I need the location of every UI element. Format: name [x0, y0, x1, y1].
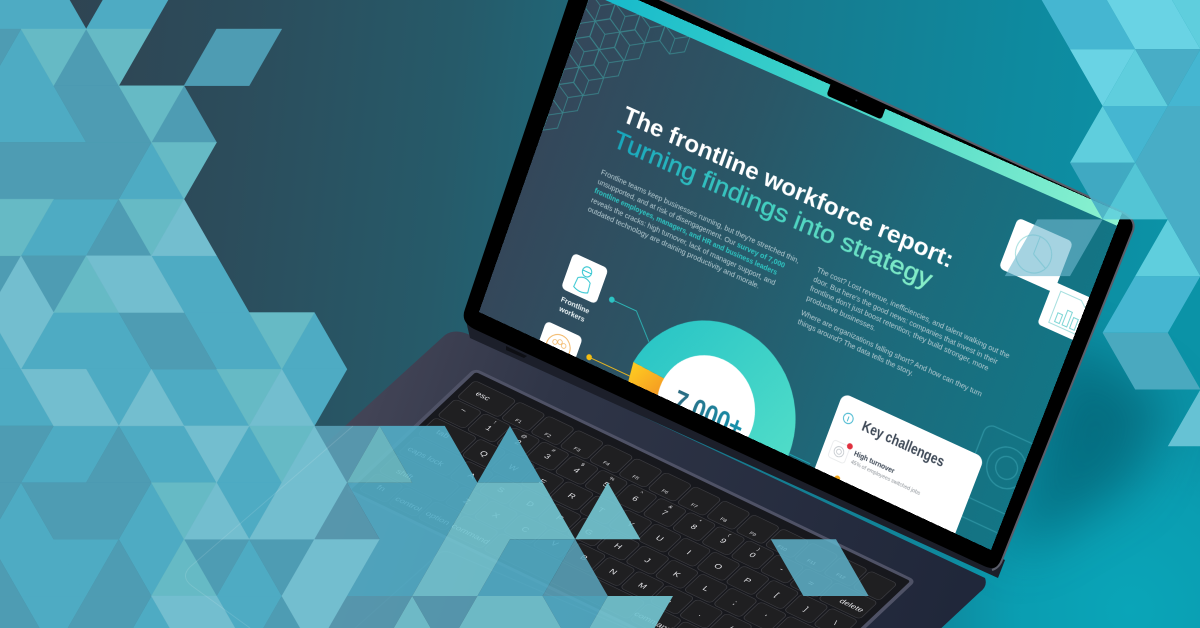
translucent triangles over lid corner: [1070, 163, 1135, 219]
key labels: shift: [394, 467, 416, 481]
right paragraph: things around? The data tells the story.: [793, 317, 904, 374]
key labels: option: [423, 509, 453, 527]
laptop lid bezel: [464, 0, 1134, 568]
key labels: [: [773, 591, 782, 599]
key labels: \: [831, 619, 841, 627]
item icon: high turnover: [828, 440, 850, 464]
key labels: O: [712, 562, 725, 571]
key labels: A: [466, 471, 478, 480]
donut value: 7,000+: [675, 386, 750, 447]
key labels: T: [595, 506, 607, 514]
key labels: control: [393, 495, 424, 513]
key labels: 4: [571, 466, 583, 475]
donut segment: yellow: [626, 362, 665, 397]
muted blue triangles: [1135, 49, 1200, 276]
pale cyan triangles: [1070, 0, 1200, 106]
key labels: G: [583, 527, 595, 537]
key labels: @: [519, 434, 528, 440]
key labels: !: [492, 421, 497, 425]
laptop screen: report page: [479, 0, 1122, 550]
key labels: F6: [660, 489, 670, 495]
key labels: tab: [434, 428, 452, 440]
bright blue triangles: [1037, 0, 1200, 333]
key labels: #: [550, 448, 557, 454]
info icon: [842, 412, 855, 425]
lower right glow: [900, 400, 1200, 628]
card: bar chart icon: [1037, 281, 1110, 349]
intro paragraph: Frontline teams keep businesses running, but they're stretched thin,: [604, 170, 795, 264]
card: pie chart icon: [999, 218, 1073, 293]
key labels: B: [578, 553, 590, 562]
translucent aqua over lid corner: [1103, 163, 1168, 219]
key labels: P: [742, 576, 754, 585]
label: frontline workers: workers: [565, 308, 593, 328]
laptop deck: [182, 332, 986, 628]
hexagon cube pattern: [531, 0, 693, 174]
laptop shadow: [1010, 340, 1165, 560]
key labels: R: [566, 491, 578, 500]
key labels: F1: [513, 418, 523, 425]
intro paragraph: reveals the cracks: high turnover, lack of manager support, and: [595, 198, 773, 286]
key labels: -: [777, 565, 787, 573]
right paragraph: door. But here's the good news: companies that invest in their: [807, 274, 981, 360]
right paragraph: Where are organizations falling short? And how can they turn: [796, 308, 967, 392]
translucent dark blue over keyboard: [314, 426, 608, 628]
key labels: F3: [572, 446, 582, 453]
key labels: I: [685, 549, 694, 556]
key labels: 1: [483, 424, 495, 432]
bottom right triangle: [1168, 390, 1200, 446]
right paragraph: The cost? Lost revenue, inefficiencies, and talent walking out the: [810, 265, 991, 354]
key labels: Y: [625, 520, 637, 529]
lid rim highlight: [644, 0, 1134, 570]
key labels: F: [554, 514, 565, 522]
trackpad outline: [353, 552, 640, 628]
key labels: command: [449, 522, 492, 546]
key labels: K: [671, 570, 683, 579]
left triangle mosaic: [0, 0, 869, 628]
key labels: *: [697, 519, 703, 524]
key labels: F2: [542, 432, 552, 439]
key labels: $: [579, 463, 586, 468]
key labels: E: [537, 477, 549, 486]
key labels: .: [697, 610, 706, 618]
mid blue triangles: [0, 0, 347, 628]
darker blue triangles: [0, 29, 314, 628]
key caps: [359, 380, 897, 628]
lower parallelogram: [1103, 333, 1200, 390]
camera notch: [826, 77, 888, 120]
donut segment: teal: [625, 291, 822, 461]
connector: frontline workers to donut: [601, 296, 658, 342]
translucent diamond over screen: [1005, 219, 1103, 276]
key labels: U: [654, 534, 666, 543]
light blue triangles: [0, 199, 380, 628]
faint laptop deck edge seen through mosaic: [185, 426, 353, 628]
key labels: 5: [601, 480, 612, 489]
key labels: 7: [659, 508, 671, 517]
title line one: The frontline workforce report:: [621, 102, 939, 268]
key labels: ;: [731, 599, 740, 606]
key labels: ]: [802, 605, 811, 612]
translucent mid blue over keyboard: [347, 426, 608, 628]
key labels: (: [726, 533, 732, 538]
key labels: Q: [478, 449, 491, 458]
key labels: =: [806, 579, 817, 587]
connector: managers to donut: [586, 353, 631, 379]
card: managers icon: [533, 321, 583, 375]
right triangle mosaic: [1005, 0, 1200, 446]
label: frontline workers: [557, 294, 591, 325]
key labels: M: [636, 581, 649, 590]
right paragraph: productive businesses.: [801, 293, 868, 330]
key labels: 9: [718, 537, 729, 545]
floating diamond over keyboard: [771, 539, 869, 596]
key labels: 0: [747, 551, 759, 559]
key labels: F11: [805, 559, 817, 566]
key labels: C: [519, 525, 532, 534]
decorative device outline: [940, 423, 1061, 580]
key labels: &: [667, 505, 675, 510]
key labels: esc: [474, 390, 493, 402]
key labels: F12: [834, 573, 847, 581]
translucent light blue over keyboard: [380, 483, 673, 628]
right paragraph: frontline don't just boost retention; they build stronger, more: [804, 284, 972, 367]
card: frontline workers icon: [561, 253, 609, 304]
key labels: V: [549, 539, 561, 548]
key labels: fn: [375, 483, 388, 493]
key labels: ): [755, 547, 761, 552]
key labels: F7: [689, 503, 699, 509]
keyboard: [348, 370, 913, 628]
item heading: high turnover: High turnover: [849, 446, 890, 473]
intro paragraph: frontline employees, managers, and HR and business leaders: [598, 189, 775, 276]
thin teal line at donut base: [789, 454, 810, 464]
key labels: F8: [718, 517, 728, 524]
item text: 45% of employees switched jobs: [847, 458, 914, 493]
intro paragraph: [587, 169, 800, 303]
key labels: N: [607, 567, 620, 576]
right paragraph: [796, 267, 1011, 413]
donut centre: [643, 339, 770, 478]
donut chart: [612, 291, 822, 496]
alert badge: red: [846, 442, 854, 450]
teal triangles: [0, 29, 314, 596]
key labels: delete: [837, 597, 867, 614]
key labels: W: [506, 463, 521, 473]
key labels: ,: [668, 596, 676, 603]
key labels: S: [495, 485, 508, 494]
intro paragraph: unsupported, and at risk of disengagement. Our survey of 7,000: [601, 180, 782, 269]
aqua triangles: [1070, 0, 1200, 276]
translucent teal over keyboard: [347, 426, 412, 483]
key labels: ': [761, 613, 769, 620]
label: frontline workers: Frontline: [568, 298, 598, 320]
key labels: 3: [542, 452, 554, 461]
heading: key challenges: Key challenges: [855, 416, 936, 466]
intro paragraph: outdated technology are draining productivity and morale.: [592, 208, 758, 290]
key labels: F10: [775, 544, 788, 552]
key labels: [366, 387, 889, 628]
card: key challenges: [804, 393, 984, 562]
key labels: J: [642, 556, 653, 564]
key labels: 2: [513, 438, 524, 446]
key labels: X: [490, 511, 503, 520]
key labels: ^: [638, 491, 645, 496]
key labels: F5: [630, 475, 640, 481]
key labels: %: [608, 476, 616, 482]
key labels: F9: [748, 531, 757, 538]
top gradient strip: [586, 0, 1132, 230]
keyboard well: [348, 370, 913, 628]
key labels: L: [701, 584, 712, 593]
key labels: 8: [689, 522, 700, 531]
key labels: H: [612, 542, 625, 551]
hinge lip: [464, 312, 1005, 578]
key labels: F4: [601, 461, 611, 467]
title line two: Turning findings into strategy: [613, 126, 921, 289]
alert badge: orange: [834, 474, 841, 483]
key labels: 6: [630, 494, 641, 503]
key labels: D: [524, 499, 537, 508]
key labels: caps lock: [405, 445, 447, 468]
hinge notch: [506, 346, 527, 358]
key labels: Z: [461, 497, 473, 505]
key labels: ~: [458, 406, 469, 414]
